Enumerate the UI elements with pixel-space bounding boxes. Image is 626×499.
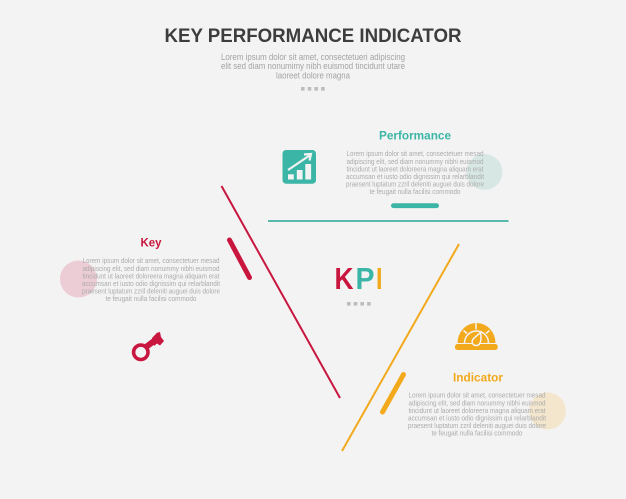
title: KEY PERFORMANCE INDICATOR: [164, 25, 462, 47]
performance text: te feugait nulla facilisi commodo: [370, 187, 461, 196]
performance text: Lorem ipsum dolor sit amet, consectetuer mesad: [346, 149, 484, 158]
key text: tincidunt ut laoreet doloreera magna aliquam erat: [82, 271, 220, 280]
key text: adipiscing elit, sed diam nonummy nibhi euismod: [82, 264, 220, 273]
icon: key: [134, 332, 164, 359]
KPI center label: K: [334, 261, 354, 296]
key heading: Key: [140, 236, 162, 250]
performance text: accumsan et iusto odio dignissim qui relarblandit: [346, 172, 484, 181]
performance text: tincidunt ut laoreet doloreera magna aliquam erat: [346, 164, 484, 173]
panel: performance: [268, 128, 508, 222]
indicator text: tincidunt ut laoreet doloreera magna aliquam erat: [408, 406, 546, 415]
key long line: [222, 186, 340, 398]
subtitle: Lorem ipsum dolor sit amet, consectetueri adipiscing: [221, 52, 405, 62]
performance text: praesent luptatum zzril deleniti auguei duis dolore: [346, 180, 484, 188]
KPI dots: [347, 302, 371, 306]
key bar: [230, 240, 250, 278]
KPI center label: I: [376, 261, 382, 296]
indicator text: adipiscing elit, sed diam nonummy nibhi euismod: [408, 398, 546, 407]
key text: accumsan et iusto odio dignissim qui relarblandit: [82, 279, 220, 288]
key text: Lorem ipsum dolor sit amet, consectetuer mesad: [82, 256, 220, 265]
indicator text: accumsan et iusto odio dignissim qui relarblandit: [408, 414, 546, 422]
KPI center label: P: [356, 261, 374, 296]
icon: growth chart: [282, 150, 316, 184]
KPI center label: [334, 261, 382, 296]
key text: praesent luptatum zzril deleniti auguei duis dolore: [82, 286, 220, 296]
icon: gauge: [455, 323, 498, 350]
performance divider line: [268, 220, 508, 222]
panel: key: [60, 186, 340, 398]
indicator text: praesent luptatum zzril deleniti auguei duis dolore: [408, 421, 546, 430]
indicator heading: Indicator: [453, 371, 503, 385]
key text: te feugait nulla facilisi commodo: [106, 294, 197, 303]
subtitle: laoreet dolore magna: [276, 71, 351, 81]
title dots: [301, 87, 325, 91]
subtitle: [221, 52, 405, 81]
indicator text: Lorem ipsum dolor sit amet, consectetuer mesad: [408, 391, 546, 400]
key circle: [60, 260, 97, 298]
key text: [82, 256, 220, 303]
panel: indicator: [342, 244, 566, 451]
indicator text: [408, 391, 546, 438]
performance circle: [466, 154, 502, 190]
performance text: [346, 149, 484, 196]
performance heading: Performance: [379, 128, 451, 142]
performance bar: [391, 203, 439, 208]
subtitle: elit sed diam nonumimy nibh euismod tincidunt utare: [221, 61, 405, 71]
indicator circle: [529, 392, 566, 430]
indicator bar: [382, 374, 404, 412]
indicator long line: [342, 244, 459, 451]
performance text: adipiscing elit, sed diam nonummy nibhi euismod: [346, 157, 484, 166]
indicator text: te feugait nulla facilisi commodo: [432, 429, 523, 438]
